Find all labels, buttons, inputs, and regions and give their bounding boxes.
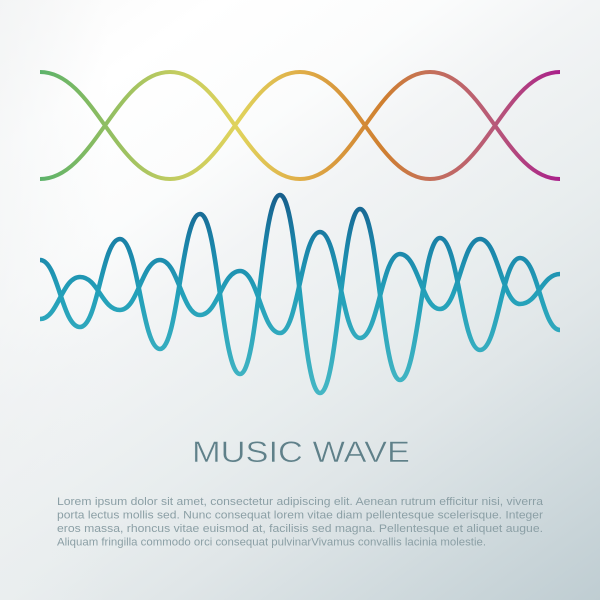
blue sound wave [40, 195, 560, 393]
body text: Lorem ipsum dolor sit amet, consectetur adipiscing elit. Aenean rutrum efficitur nisi, viverra [57, 496, 544, 508]
title: MUSIC WAVE [192, 436, 410, 469]
rainbow wave [40, 72, 560, 179]
body text [57, 496, 544, 548]
body text: porta lectus mollis sed. Nunc consequat lorem vitae diam pellentesque scelerisque. Integer [57, 510, 543, 522]
body text: Aliquam fringilla commodo orci consequat pulvinarVivamus convallis lacinia molestie. [57, 536, 486, 548]
body text: eros massa, rhoncus vitae euismod at, facilisis sed magna. Pellentesque et aliquet augue. [57, 523, 543, 535]
